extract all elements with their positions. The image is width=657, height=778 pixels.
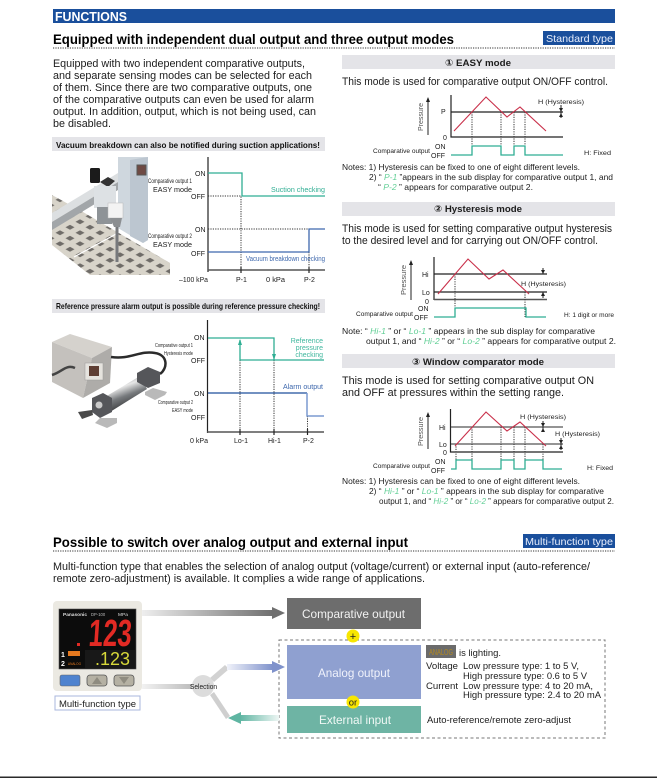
line: comparative output (451, 146, 563, 155)
chart: suction and vacuum breakdown: P-2 (304, 277, 315, 284)
arrow: from external input (228, 712, 279, 724)
chart: Hysteresis mode: H: 1 digit or more (564, 312, 615, 319)
mode heading: EASY: ① EASY mode (445, 58, 511, 69)
chart: suction and vacuum breakdown: OFF (191, 251, 205, 258)
panel: EASY mode (342, 55, 615, 192)
mode heading: Window comparator (342, 354, 615, 368)
chart: Window comparator mode: Hi (439, 425, 446, 432)
selection branches (142, 665, 230, 719)
dashed group: analog or external (279, 640, 605, 738)
chart: suction and vacuum breakdown: EASY mode (153, 242, 192, 249)
mode description: Window comparator: This mode is used for setting comparative output ON (342, 375, 594, 387)
chart: reference pressure and alarm: EASY mode (172, 408, 193, 414)
chart: reference pressure and alarm: Comparative output 2 (158, 400, 193, 406)
callout heading: reference pressure alarm: Reference pressure alarm output is possible during reference pressure checking! (56, 301, 320, 311)
icon: or badge: or (349, 698, 357, 708)
chart: EASY mode (373, 95, 611, 160)
intro paragraph: Equipped with two independent comparative outputs, (53, 58, 305, 70)
callout heading: reference pressure alarm (52, 299, 325, 313)
chart: Window comparator mode (373, 409, 613, 475)
chart: suction and vacuum breakdown: 0 kPa (266, 277, 285, 284)
analog specification: Current (426, 681, 459, 691)
chart: Window comparator mode: ON (435, 459, 446, 466)
chart: EASY mode: OFF (431, 153, 445, 160)
mode heading: Hysteresis: ② Hysteresis mode (434, 204, 522, 215)
chart: Hysteresis mode: H (Hysteresis) (521, 281, 566, 288)
illustration: cylinder and tank (52, 334, 167, 428)
chart: Window comparator mode: OFF (431, 468, 445, 475)
icon: pressure sensor device: MPa (118, 612, 128, 618)
notes: EASY mode: Notes: 1) Hysteresis can be fixed to one of eight different levels. (342, 162, 580, 172)
chart: reference pressure and alarm (155, 320, 324, 445)
label: Multi-function type: Multi-function type (59, 699, 136, 710)
chart: reference pressure and alarm: ON (194, 391, 204, 398)
line: pressure (438, 259, 529, 294)
heading: analog output and external input: Possible to switch over analog output and external input (53, 534, 408, 550)
analog specification (426, 645, 601, 725)
notes: Window comparator mode: output 1, and “ Hi-2 ” or “ Lo-2 ” appears for comparative output 2. (379, 496, 614, 506)
box: comparative output: Comparative output (302, 607, 406, 621)
panel: vacuum breakdown (52, 137, 325, 284)
chart: suction and vacuum breakdown: ON (195, 227, 206, 234)
analog specification: High pressure type: 2.4 to 20 mA (463, 690, 601, 700)
chart: EASY mode: P (441, 109, 446, 116)
icon: pressure sensor device: Panasonic (63, 612, 87, 618)
box: analog output: Analog output (318, 666, 391, 680)
diagram: output selection (53, 598, 605, 738)
chart: Hysteresis mode: Lo (422, 290, 430, 297)
intro paragraph (53, 58, 316, 130)
chart: suction and vacuum breakdown (148, 157, 325, 284)
chart: suction and vacuum breakdown: ON (195, 171, 206, 178)
chart: Hysteresis mode: Pressure (401, 265, 408, 295)
line: comparative output 1 (208, 173, 325, 196)
icon: pressure sensor device: .123 (95, 649, 130, 669)
intro paragraph: of them. Since there are two comparative outputs, one (53, 82, 312, 94)
line: comparative output 2 (208, 392, 307, 394)
illustration: pick and place machine (52, 157, 170, 275)
section description: Multi-function type that enables the selection of analog output (voltage/current) or external input (auto-reference/ (53, 561, 590, 573)
section description: remote zero-adjustment) is available. It complies a wide range of applications. (53, 573, 425, 585)
analog specification: Low pressure type: 1 to 5 V, (463, 661, 579, 671)
chart: reference pressure and alarm: OFF (191, 358, 205, 365)
note: Hysteresis mode: Note: “ Hi-1 ” or “ Lo-1 ” appears in the sub display for comparative (342, 326, 595, 336)
mode description: Hysteresis: to the desired level and for carrying out ON/OFF control. (342, 235, 598, 247)
intro paragraph: and separate sensing modes can be selected for each (53, 70, 312, 82)
chart: suction and vacuum breakdown: Vacuum breakdown checking (246, 256, 325, 263)
badge: Standard type: Standard type (546, 33, 613, 45)
chart: EASY mode: Pressure (418, 103, 425, 131)
intro paragraph: be disabled. (53, 118, 111, 130)
chart: Hysteresis mode (356, 257, 615, 322)
chart: Hysteresis mode: ON (418, 306, 428, 313)
chart: reference pressure and alarm: P-2 (303, 438, 314, 445)
section banner: FUNCTIONS (53, 9, 615, 24)
chart: reference pressure and alarm: Hysteresis mode (164, 351, 193, 357)
mode heading: Hysteresis (342, 202, 615, 216)
section banner: FUNCTIONS: FUNCTIONS (55, 10, 127, 24)
mode description: Hysteresis: This mode is used for setting comparative output hysteresis (342, 223, 612, 235)
panel: Window comparator mode (342, 354, 615, 506)
analog specification: Auto-reference/remote zero-adjust (427, 715, 572, 725)
arrow: to analog output (227, 661, 285, 673)
chart: reference pressure and alarm: 0 kPa (190, 438, 208, 445)
chart: Window comparator mode: Pressure (418, 417, 425, 446)
chart: Hysteresis mode: 0 (425, 299, 429, 306)
chart: suction and vacuum breakdown: –100 kPa (179, 277, 208, 284)
chart: suction and vacuum breakdown: Comparative output 1 (148, 179, 193, 185)
chart: reference pressure and alarm: Reference (291, 338, 323, 345)
chart: Window comparator mode: 0 (443, 450, 447, 457)
mode description: EASY: This mode is used for comparative output ON/OFF control. (342, 76, 608, 88)
chart: Window comparator mode: H: Fixed (587, 465, 613, 472)
chart: suction and vacuum breakdown: P-1 (236, 277, 247, 284)
icon: or badge (346, 696, 360, 708)
icon: pressure sensor device: 2 (61, 661, 65, 668)
chart: suction and vacuum breakdown: OFF (191, 194, 205, 201)
mode heading: EASY (342, 55, 615, 69)
notes: EASY mode (342, 162, 613, 192)
mode heading: Window comparator: ③ Window comparator mode (412, 357, 544, 368)
box: comparative output (287, 598, 421, 629)
note: Hysteresis mode: output 1, and “ Hi-2 ” or “ Lo-2 ” appears for comparative output 2. (366, 336, 616, 346)
analog specification: High pressure type: 0.6 to 5 V (463, 671, 587, 681)
mode description: Window comparator (342, 375, 594, 399)
callout heading: vacuum breakdown (52, 137, 325, 151)
section description (53, 561, 590, 585)
intro paragraph: output. In addition, output, which is not being used, can (53, 106, 316, 118)
chart: suction and vacuum breakdown: Comparative output 2 (148, 234, 193, 240)
chart: EASY mode: Comparative output (373, 148, 430, 155)
chart: reference pressure and alarm: OFF (191, 415, 205, 422)
line: pressure (454, 97, 546, 131)
selection branches: Selection (190, 682, 217, 691)
icon: pressure sensor device: DP-100 (91, 612, 106, 617)
panel: Hysteresis mode (342, 202, 616, 346)
chart: Window comparator mode: H (Hysteresis) (520, 414, 566, 421)
line: comparative output 1 (208, 338, 324, 360)
chart: Hysteresis mode: Comparative output (356, 311, 413, 318)
box: external input (287, 706, 421, 733)
chart: Window comparator mode: Lo (439, 442, 447, 449)
chart: suction and vacuum breakdown: Suction checking (271, 187, 325, 194)
chart: Window comparator mode: Comparative output (373, 463, 430, 470)
icon: pressure sensor device (53, 601, 142, 691)
analog specification: Low pressure type: 4 to 20 mA, (463, 681, 593, 691)
chart: reference pressure and alarm: pressure (296, 345, 323, 352)
icon: ANALOG indicator: ANALOG (429, 648, 453, 657)
analog specification: Voltage (426, 661, 458, 671)
panel: reference pressure alarm (52, 299, 325, 445)
line: comparative output (451, 460, 562, 469)
icon: plus badge (346, 630, 360, 643)
chart: reference pressure and alarm: checking (295, 352, 323, 359)
line: comparative output (434, 308, 546, 317)
chart: reference pressure and alarm: Alarm output (283, 384, 323, 391)
callout heading: vacuum breakdown: Vacuum breakdown can also be notified during suction applications! (56, 140, 320, 150)
icon: pressure sensor device: 1 (61, 652, 65, 659)
analog specification: is lighting. (459, 648, 501, 658)
chart: Hysteresis mode: OFF (414, 315, 428, 322)
notes: Window comparator mode (342, 476, 614, 506)
icon: pressure sensor device: ANALOG (68, 662, 81, 666)
mode description: Window comparator: and OFF at pressures within the setting range. (342, 387, 564, 399)
notes: Window comparator mode: Notes: 1) Hysteresis can be fixed to one of eight different levels. (342, 476, 580, 486)
chart: EASY mode: H (Hysteresis) (538, 99, 584, 106)
box: external input: External input (319, 713, 392, 727)
badge: Multi-function type: Multi-function type (525, 536, 613, 548)
line: comparative output 2 (208, 229, 325, 252)
box: analog output (287, 645, 421, 699)
mode description: Hysteresis (342, 223, 612, 247)
chart: reference pressure and alarm: Lo-1 (234, 438, 248, 445)
chart: EASY mode: 0 (443, 135, 447, 142)
chart: reference pressure and alarm: Comparative output 1 (155, 343, 193, 349)
notes: Window comparator mode: 2) “ Hi-1 ” or “ Lo-1 ” appears in the sub display for comparative (369, 486, 604, 496)
note: Hysteresis mode (342, 326, 616, 346)
arrow: to comparative output (142, 607, 285, 619)
chart: Window comparator mode: H (Hysteresis) (555, 431, 600, 438)
heading: dual output: Equipped with independent dual output and three output modes (53, 31, 454, 47)
intro paragraph: of the comparative outputs can even be used for alarm (53, 94, 314, 106)
chart: suction and vacuum breakdown: EASY mode (153, 187, 192, 194)
chart: Hysteresis mode: Hi (422, 272, 429, 279)
icon: plus badge: + (350, 631, 356, 643)
chart: EASY mode: H: Fixed (584, 150, 611, 157)
chart: EASY mode: ON (435, 144, 446, 151)
notes: EASY mode: 2) “ P-1 ”appears in the sub display for comparative output 1, and (369, 172, 613, 182)
icon: ANALOG indicator (426, 645, 456, 658)
icon: pressure sensor device: 123 (87, 613, 133, 655)
chart: reference pressure and alarm: Hi-1 (268, 438, 281, 445)
line: pressure (455, 412, 546, 446)
notes: EASY mode: “ P-2 ” appears for comparative output 2. (378, 182, 533, 192)
chart: reference pressure and alarm: ON (194, 335, 204, 342)
